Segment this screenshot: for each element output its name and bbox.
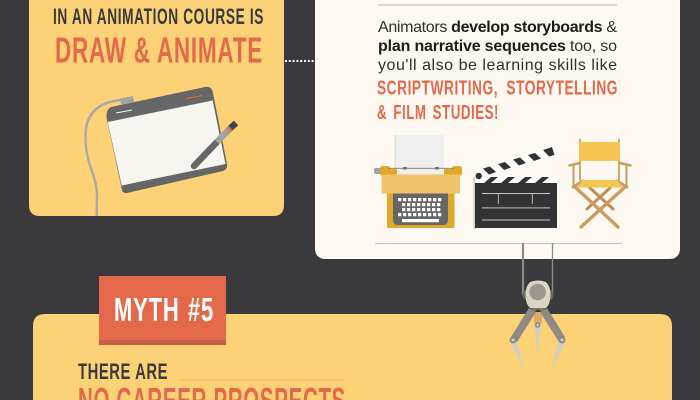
heading: there are: THERE ARE (78, 359, 168, 384)
heading: in an animation course is: IN AN ANIMATION COURSE IS (53, 4, 264, 29)
heading: scriptwriting, storytelling and film studies (377, 76, 618, 124)
text block: animators description: Animators develop storyboards & (378, 19, 617, 36)
heading: scriptwriting, storytelling and film studies: & FILM STUDIES! (377, 101, 499, 124)
badge: myth 5: MYTH #5 (114, 291, 214, 328)
panel: myth 5 (33, 314, 672, 400)
text block: animators description: you'll also be learning skills like (378, 57, 617, 74)
panel: storyboards and narrative (315, 0, 680, 259)
icon: film clapperboard (474, 147, 557, 229)
icon: mechanical claw (510, 243, 566, 370)
icon: typewriter (374, 135, 462, 228)
connector: dotted line (285, 60, 315, 62)
text block: animators description: plan narrative sequences too, so (378, 38, 617, 55)
divider: stage floor (375, 242, 622, 244)
badge: myth 5 (99, 276, 226, 345)
icon: director's chair (570, 140, 630, 227)
text block: animators description (378, 19, 617, 74)
panel: draw and animate (29, 0, 284, 216)
icon: drawing tablet with pen (85, 87, 236, 216)
icon: pen (194, 123, 236, 166)
heading: draw and animate: DRAW & ANIMATE (55, 30, 263, 70)
